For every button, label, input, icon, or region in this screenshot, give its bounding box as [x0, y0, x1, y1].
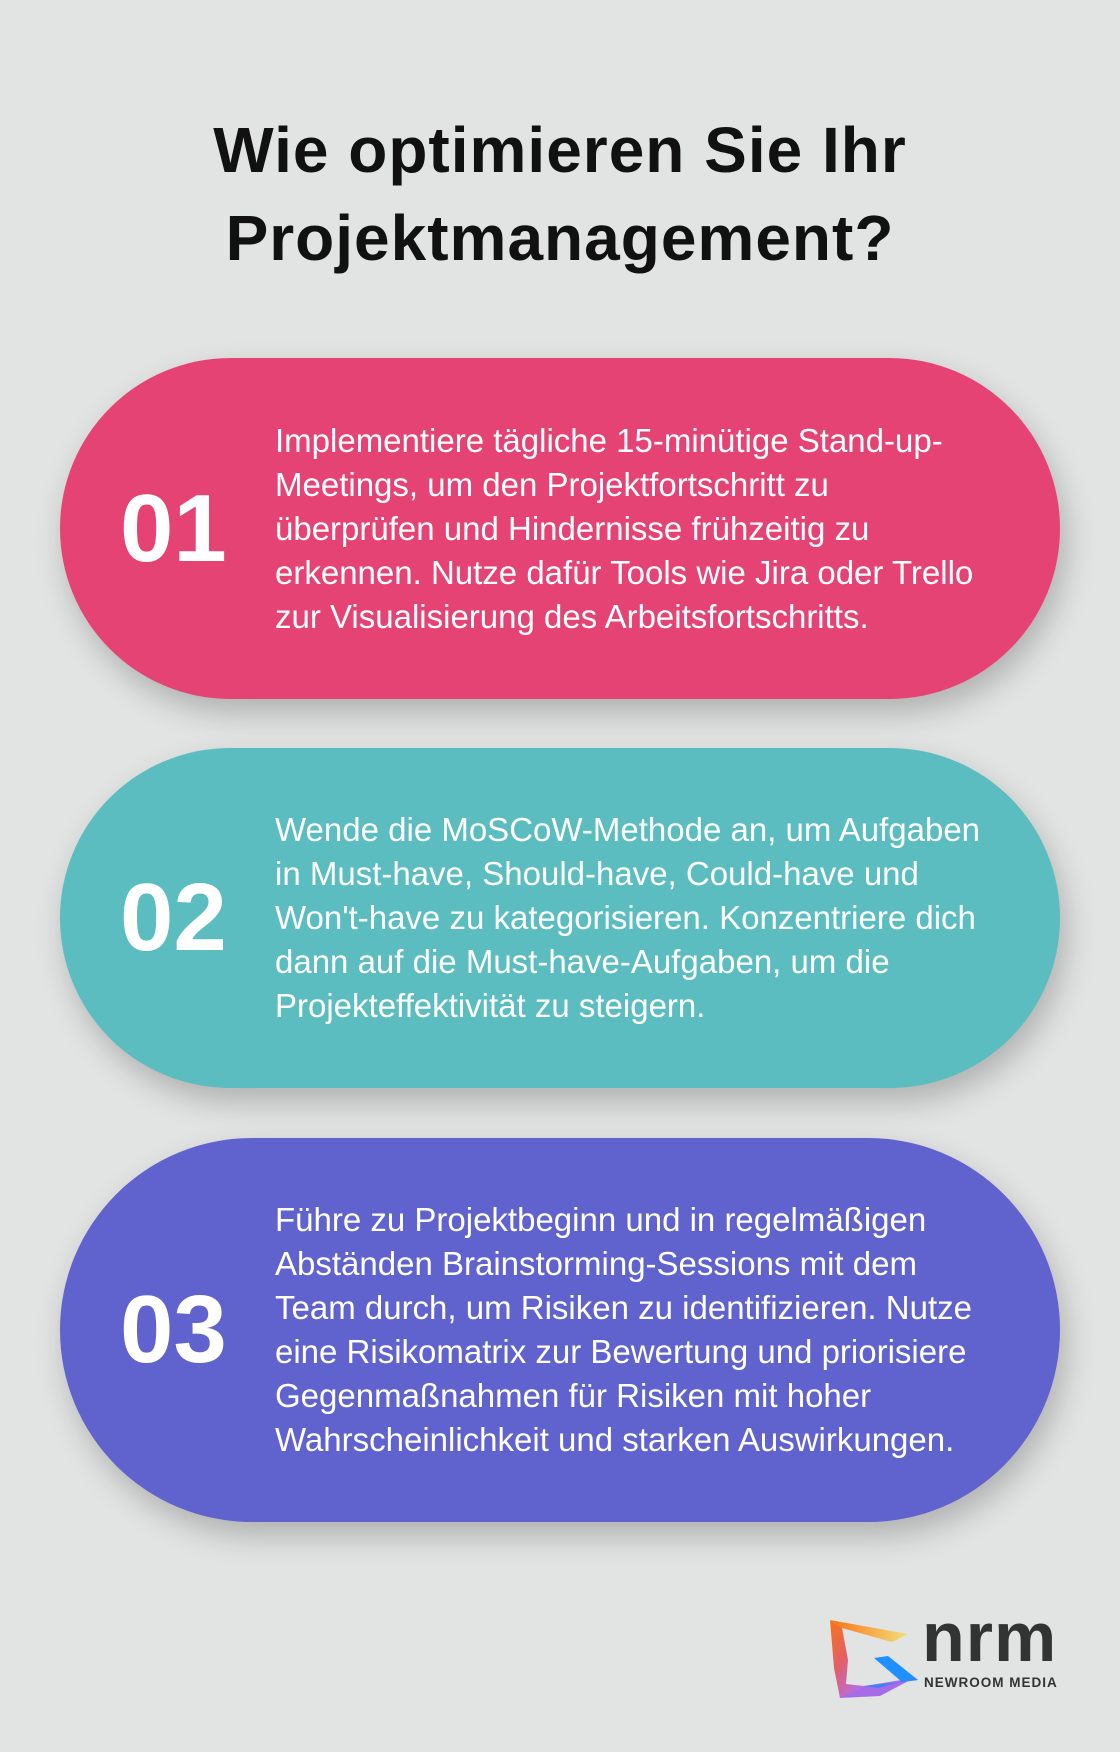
title: Wie optimieren Sie Ihr [213, 114, 907, 186]
text block 02: in Must-have, Should-have, Could-have und [275, 855, 919, 892]
text block 02: Projekteffektivität zu steigern. [275, 987, 705, 1024]
title: Projektmanagement? [226, 202, 894, 274]
text block 01: zur Visualisierung des Arbeitsfortschritts. [275, 598, 869, 634]
text block 02: Won't-have zu kategorisieren. Konzentriere dich [275, 899, 976, 936]
text block 01: erkennen. Nutze dafür Tools wie Jira oder Trello [275, 554, 973, 590]
panel: step 02 [60, 748, 1060, 1088]
panel: step 01 [60, 358, 1060, 699]
text block 03: eine Risikomatrix zur Bewertung und priorisiere [275, 1333, 966, 1370]
icon: nrm logo mark [830, 1620, 918, 1698]
text block 02 [275, 811, 980, 1024]
number 01: 01 [120, 474, 227, 582]
text block 03: Wahrscheinlichkeit und starken Auswirkungen. [275, 1421, 954, 1458]
logo text: nrm [922, 1598, 1057, 1676]
text block 01 [275, 422, 973, 635]
text block 03: Team durch, um Risiken zu identifizieren. Nutze [275, 1289, 972, 1326]
text block 02: dann auf die Must-have-Aufgaben, um die [275, 943, 890, 980]
panel: step 03 [60, 1138, 1060, 1522]
text block 03 [275, 1201, 972, 1458]
text block 01: Meetings, um den Projektfortschritt zu [275, 466, 829, 502]
text block 03: Abständen Brainstorming-Sessions mit dem [275, 1245, 917, 1282]
text block 02: Wende die MoSCoW-Methode an, um Aufgaben [275, 811, 980, 848]
number 03: 03 [120, 1276, 227, 1383]
text block 01: überprüfen und Hindernisse frühzeitig zu [275, 510, 869, 546]
text block 01: Implementiere tägliche 15-minütige Stand-up- [275, 422, 943, 458]
text block 03: Führe zu Projektbeginn und in regelmäßigen [275, 1201, 926, 1238]
logo: NEWROOM MEDIA [924, 1675, 1058, 1690]
logo [830, 1598, 1058, 1698]
text block 03: Gegenmaßnahmen für Risiken mit hoher [275, 1377, 871, 1414]
number 02: 02 [120, 864, 227, 971]
title [213, 114, 907, 274]
